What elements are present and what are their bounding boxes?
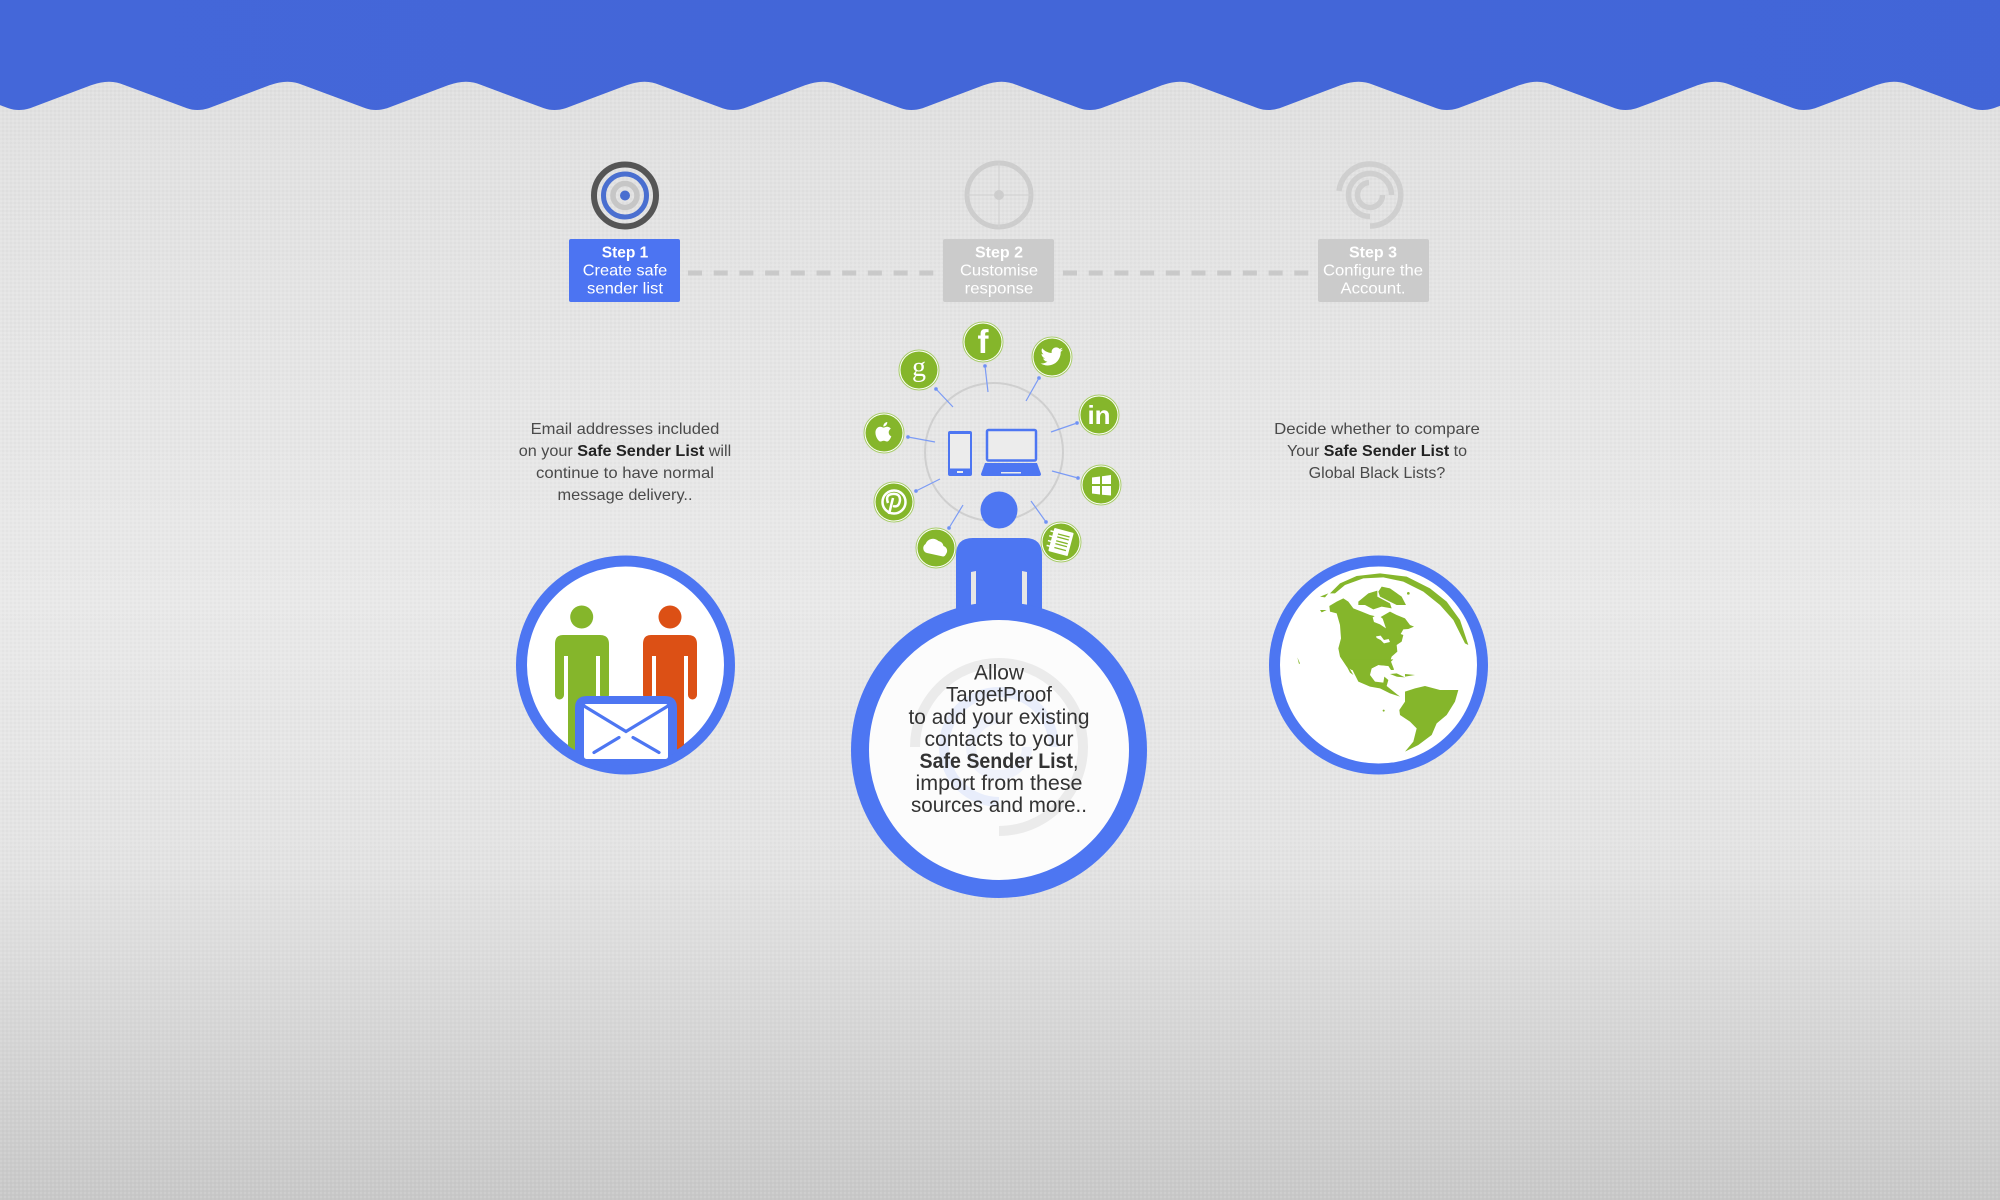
- left circle: two people and envelope: [522, 561, 730, 770]
- icon: cloud: [916, 528, 956, 568]
- icon: linkedin: [1079, 395, 1119, 435]
- step 2 label: response: [965, 280, 1033, 298]
- icon: step 2 crosshair: [967, 163, 1031, 227]
- left description text: message delivery..: [558, 487, 692, 504]
- icon: apple: [864, 413, 904, 453]
- left description text: continue to have normal: [536, 465, 714, 482]
- dashed connector 2: [1063, 270, 1308, 276]
- right circle: globe: [1274, 561, 1482, 769]
- right description text: Decide whether to compare: [1274, 421, 1480, 438]
- icon: facebook: [963, 322, 1003, 362]
- icon: linkedin: in: [1087, 400, 1111, 430]
- step 2 label: [943, 239, 1054, 302]
- left description text: Email addresses included: [531, 421, 719, 438]
- icon: phone: [948, 431, 972, 476]
- central text: Allow: [974, 662, 1025, 684]
- icon: step 3 spiral: [1339, 164, 1401, 226]
- right description text: Global Black Lists?: [1309, 465, 1445, 482]
- central text: Safe Sender List,: [920, 750, 1078, 773]
- central person head: [980, 492, 1018, 528]
- central text: to add your existing: [908, 706, 1090, 729]
- icon: pinterest: [874, 482, 914, 522]
- device circle ring: [925, 383, 1063, 521]
- connector lines: [907, 365, 1079, 529]
- central text: TargetProof: [946, 684, 1052, 706]
- step 1 label: [569, 239, 680, 302]
- dashed connector 1: [688, 270, 933, 276]
- step 2 label: Step 2: [975, 244, 1023, 262]
- left description text: on your Safe Sender List will: [519, 443, 731, 460]
- body slits: [971, 571, 1027, 605]
- central text: [908, 662, 1090, 817]
- icon: windows: [1081, 465, 1121, 505]
- icon: orange person: [643, 606, 697, 750]
- central circle: [860, 611, 1138, 889]
- globe land: southern part: [1343, 659, 1458, 752]
- central text: sources and more..: [911, 794, 1087, 817]
- globe land: northern part: [1297, 573, 1468, 670]
- central person body: [956, 538, 1042, 640]
- icon: step 1 target: [594, 164, 656, 226]
- icon: envelope: [575, 696, 677, 766]
- icon: google: g: [912, 352, 926, 383]
- icon: green person: [555, 606, 609, 750]
- left description text: [519, 421, 731, 504]
- step 1 label: Create safe: [583, 262, 667, 280]
- central text: import from these: [916, 772, 1082, 795]
- central text: contacts to your: [924, 728, 1074, 751]
- icon: twitter: [1032, 337, 1072, 377]
- step 3 label: Step 3: [1349, 244, 1397, 262]
- right description text: Your Safe Sender List to: [1287, 443, 1467, 460]
- watermark spiral: [915, 663, 1083, 831]
- step 3 label: Configure the: [1323, 262, 1423, 280]
- right description text: [1274, 421, 1480, 482]
- header wave band: [0, 0, 2000, 110]
- step 3 label: Account.: [1340, 280, 1406, 298]
- step 2 label: Customise: [960, 262, 1038, 280]
- icon: facebook: f: [978, 323, 990, 360]
- icon: contact notebook: [1041, 522, 1081, 562]
- step 1 label: Step 1: [602, 244, 649, 262]
- step 3 label: [1318, 239, 1429, 302]
- icon: laptop: [981, 430, 1041, 476]
- step 1 label: sender list: [587, 280, 664, 298]
- icon: google: [899, 350, 939, 390]
